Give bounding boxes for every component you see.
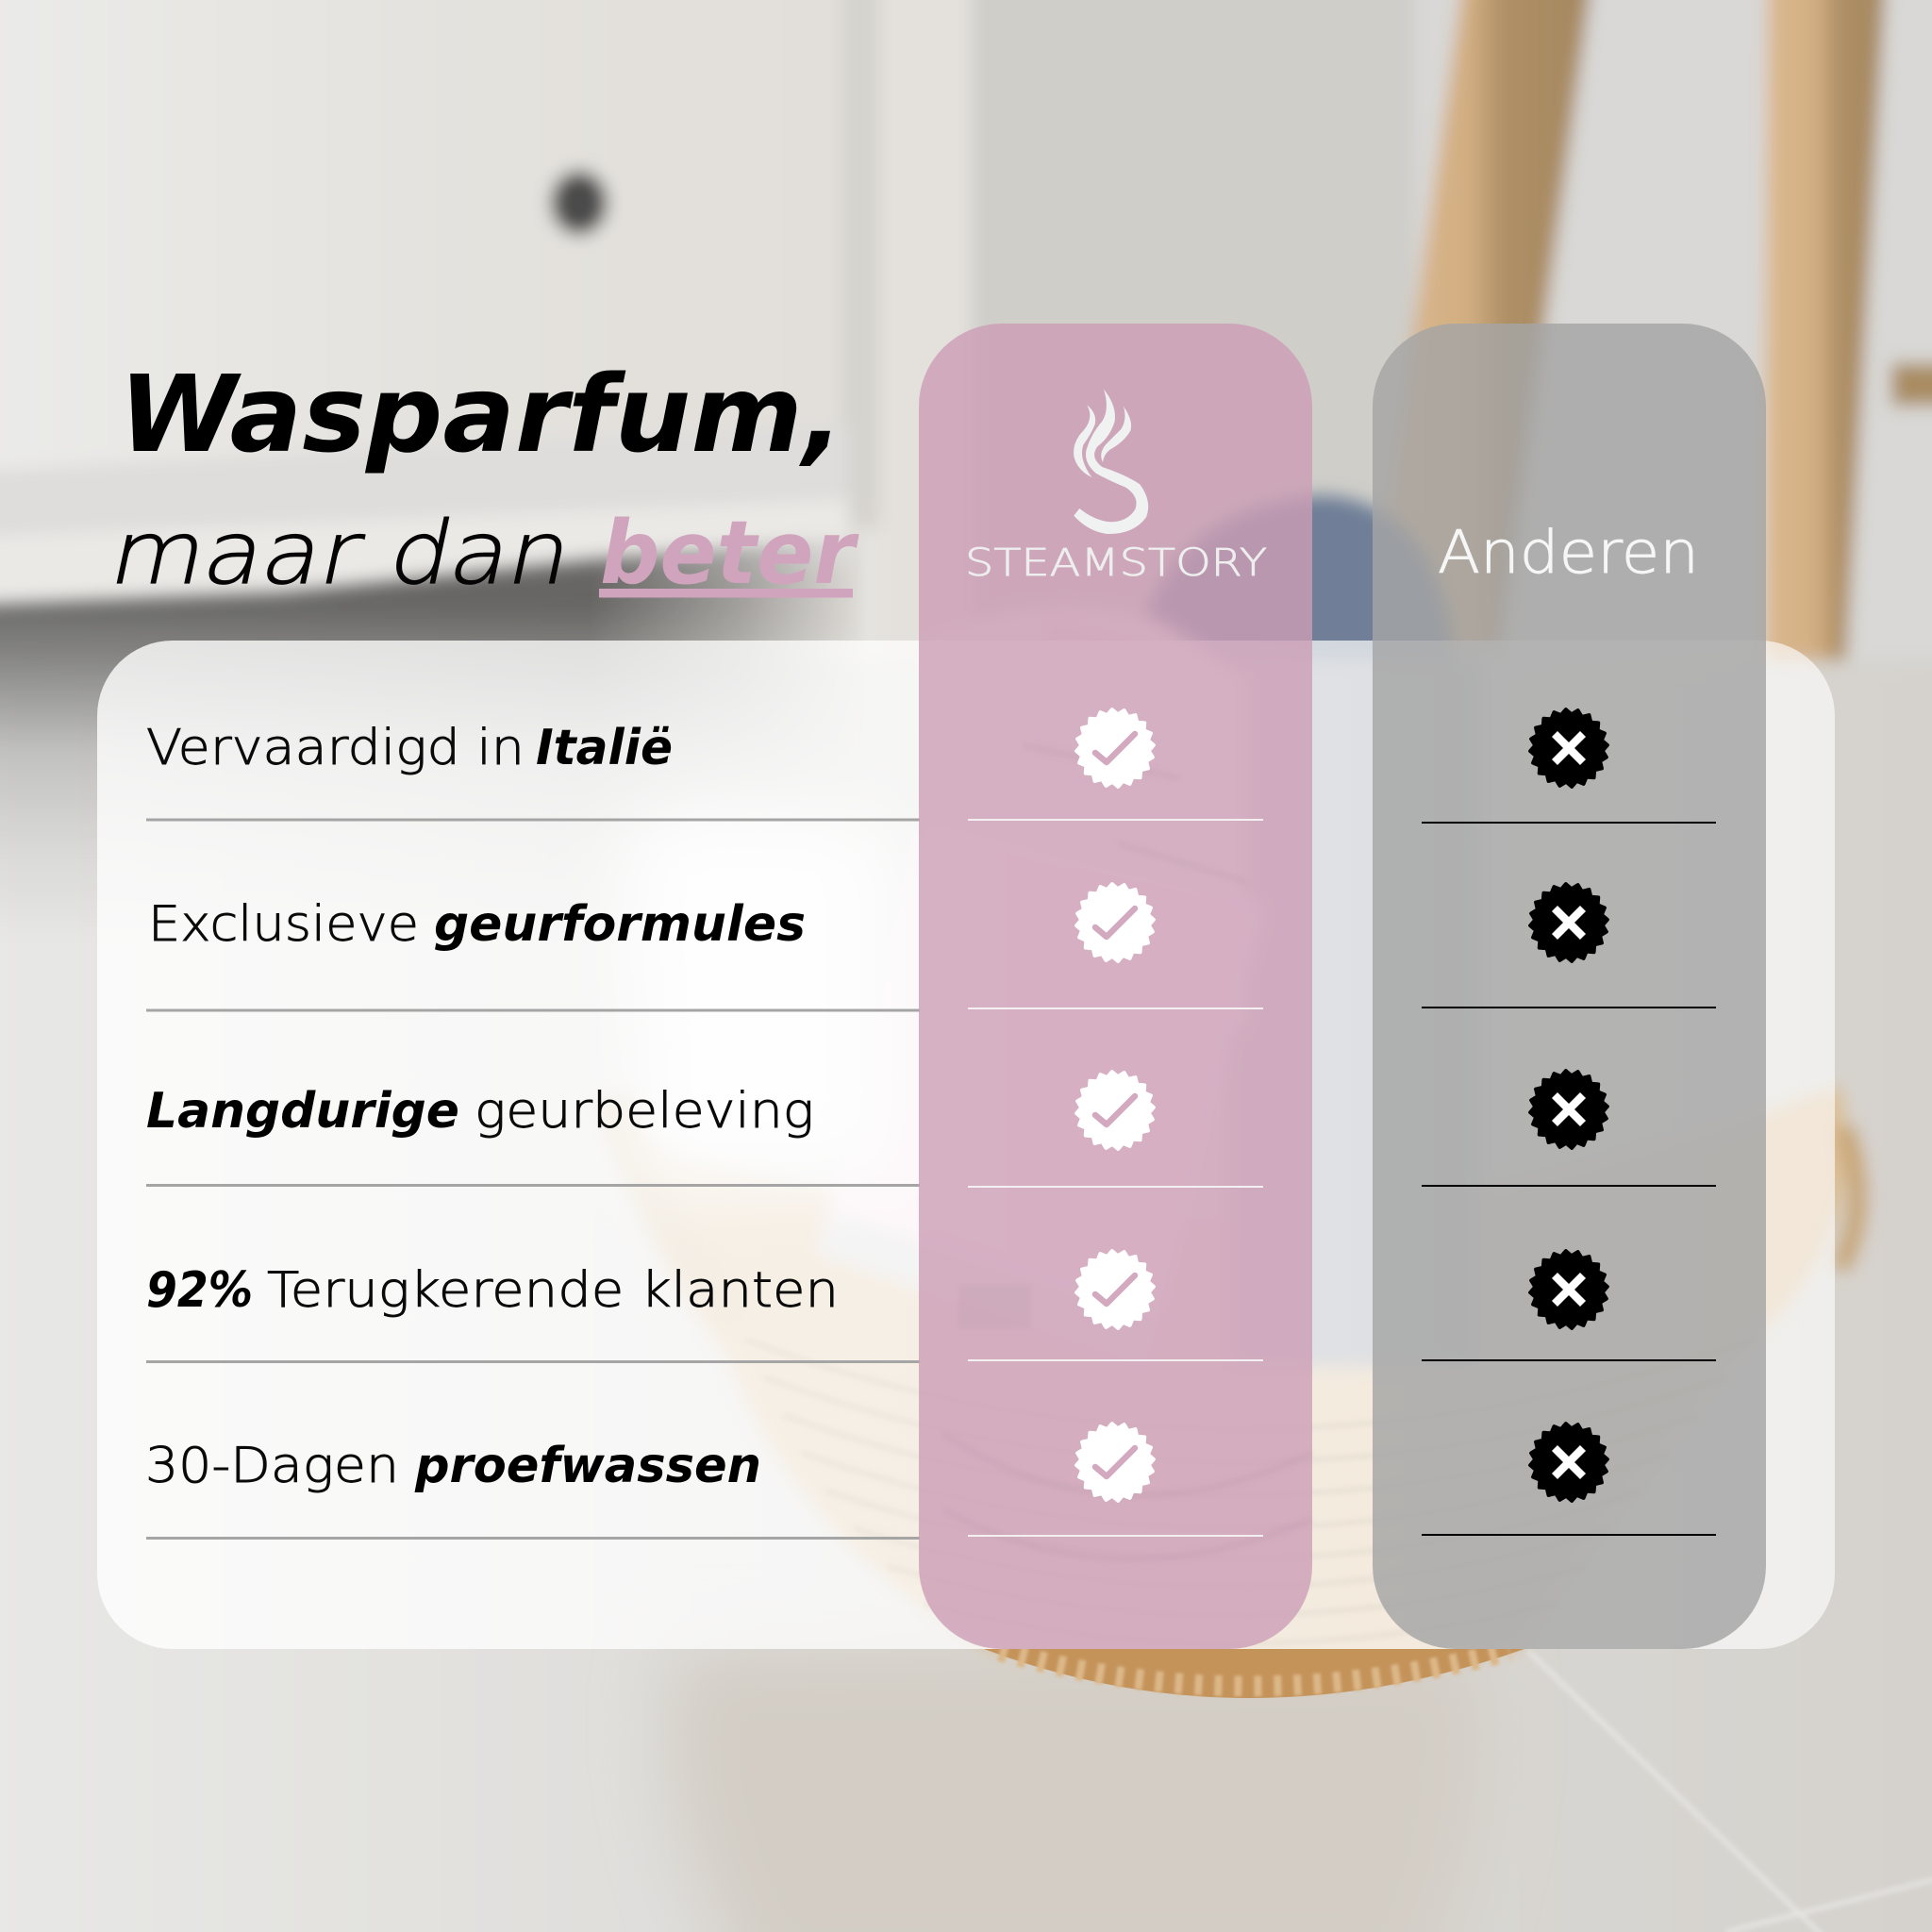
- row 4 label: 92%: [146, 1262, 253, 1319]
- drawer shadow: [0, 537, 854, 891]
- white row dividers: [968, 819, 1263, 1537]
- icon: check badge row 5: [1071, 1418, 1159, 1507]
- icon: cross badge row 2: [1524, 878, 1613, 967]
- icon: cross badge row 4: [1524, 1245, 1613, 1334]
- row 2 label: Exclusieve: [148, 896, 419, 953]
- white glass comparison panel: [97, 641, 1835, 1649]
- row labels: [145, 720, 839, 1494]
- icon: cross badge row 1: [1524, 704, 1613, 792]
- logo: Steamstory: STEAMSTORY: [965, 541, 1267, 585]
- row 4 label: Terugkerende klanten: [267, 1262, 839, 1319]
- icon: check badge row 2: [1071, 878, 1159, 967]
- title: beter: [600, 502, 859, 604]
- towels: [1132, 495, 1457, 755]
- black row dividers: [1422, 822, 1716, 1536]
- icon: steam S: [1074, 390, 1148, 534]
- rope base of basket: [984, 1649, 1524, 1698]
- row 5 label: 30-Dagen: [145, 1438, 399, 1494]
- row 2 label: [148, 896, 806, 953]
- row 3 label: [146, 1083, 814, 1140]
- row 1 label: [146, 720, 673, 776]
- title: Wasparfum,: [119, 354, 843, 476]
- row 1 label: Italië: [536, 720, 673, 776]
- icon: cross badge row 5: [1524, 1418, 1613, 1507]
- reflection: [670, 1649, 1482, 1932]
- title: maar dan: [102, 503, 581, 604]
- row 3 label: geurbeleving: [475, 1083, 814, 1140]
- row 2 label: geurformules: [434, 896, 806, 953]
- row 5 label: proefwassen: [414, 1438, 761, 1494]
- logo: Steamstory: [965, 390, 1267, 585]
- panel: Steamstory column: [919, 324, 1312, 1649]
- bottle: [819, 821, 1264, 1368]
- white towel: [623, 807, 896, 1179]
- heading: Anderen: Anderen: [1438, 518, 1699, 587]
- icon: check badge row 4: [1071, 1245, 1159, 1334]
- tile joints: [1528, 1651, 1932, 1932]
- row 5 label: [145, 1438, 761, 1494]
- icon: check badge row 3: [1071, 1066, 1159, 1155]
- basket: [604, 1085, 1847, 1669]
- title: [102, 354, 859, 604]
- panel: Anderen column: [1373, 324, 1766, 1649]
- icon: check badge row 1: [1071, 704, 1159, 792]
- icon: cross badge row 3: [1524, 1065, 1613, 1154]
- row 1 label: Vervaardigd in: [146, 720, 525, 776]
- faint bottle seen through the column: [943, 745, 1312, 1559]
- wicker texture: [745, 1340, 1755, 1643]
- row 3 label: Langdurige: [146, 1083, 459, 1140]
